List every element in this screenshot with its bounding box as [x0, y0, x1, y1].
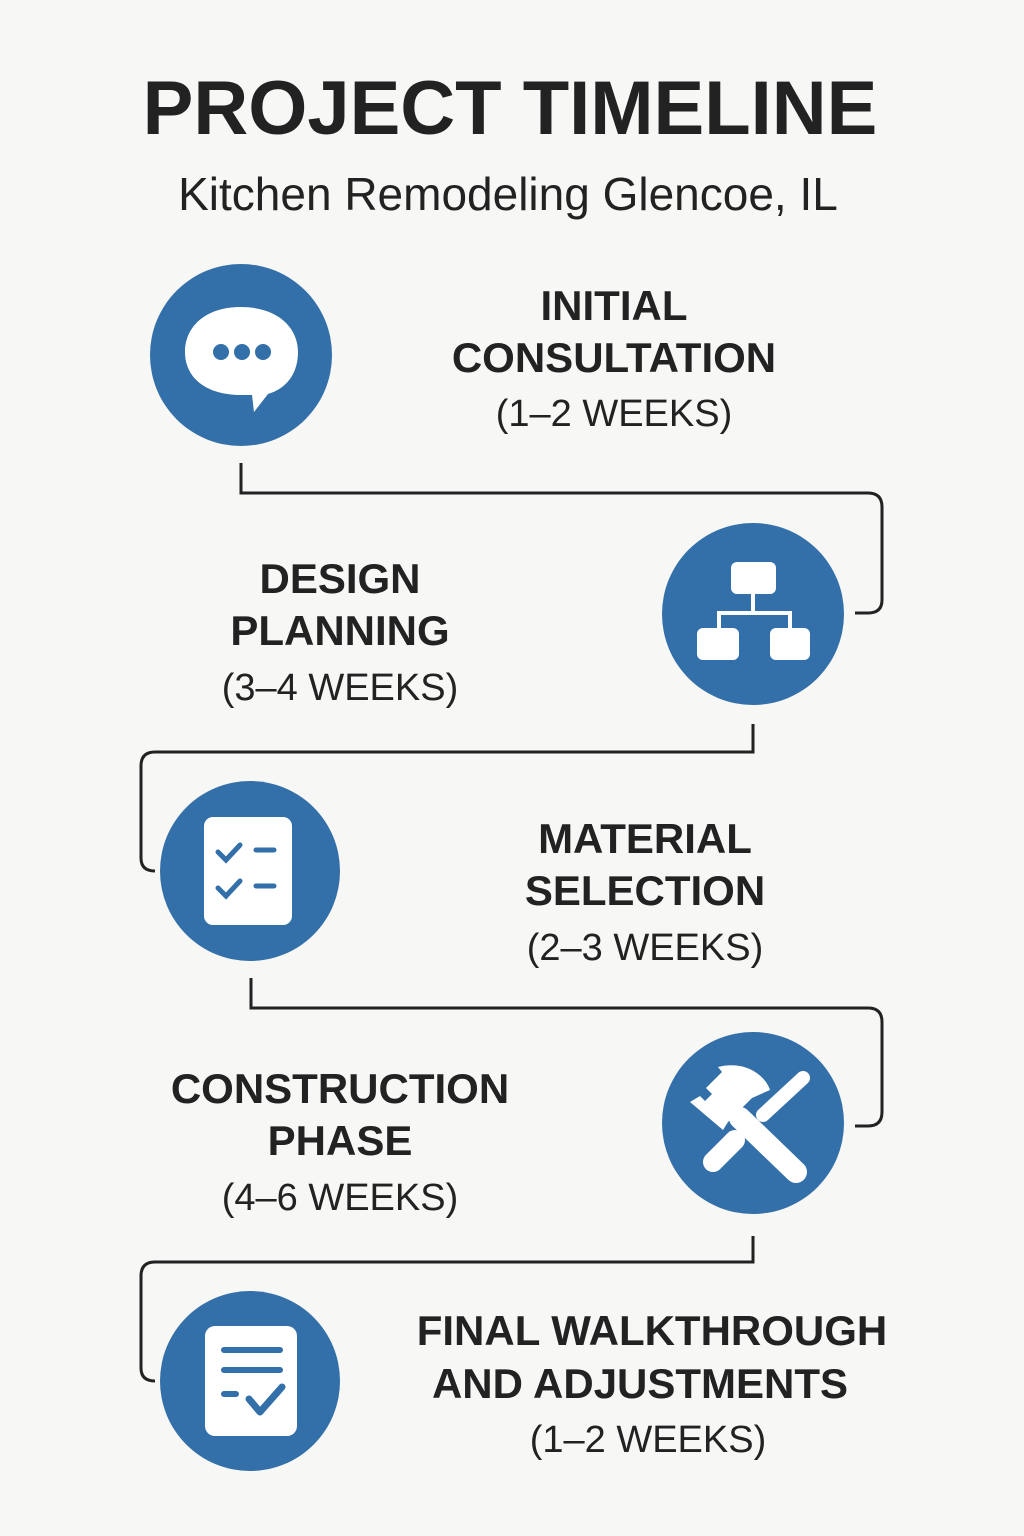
step 2 text: DESIGN	[259, 555, 421, 602]
step 2 text: (3–4 WEEKS)	[222, 667, 458, 709]
step 3 text: SELECTION	[525, 867, 765, 914]
step 4 text: PHASE	[268, 1117, 412, 1164]
step 1 text: CONSULTATION	[452, 334, 776, 381]
step 3 text: MATERIAL	[538, 815, 752, 862]
connector 2	[141, 724, 753, 871]
subtitle: Kitchen Remodeling Glencoe, IL	[178, 168, 838, 220]
step 1 text: INITIAL	[541, 282, 687, 329]
step 5 text: AND ADJUSTMENTS	[432, 1360, 848, 1407]
connector 4	[141, 1236, 753, 1381]
icon: flowchart	[662, 523, 844, 705]
title: PROJECT TIMELINE	[143, 66, 877, 151]
step 4 text: CONSTRUCTION	[171, 1065, 509, 1112]
step 4 text	[171, 1065, 509, 1219]
icon: tools	[662, 1032, 844, 1214]
step 1 text: (1–2 WEEKS)	[496, 393, 732, 435]
icon: checklist	[160, 781, 340, 961]
step 5 text: (1–2 WEEKS)	[530, 1419, 766, 1461]
connector 1	[241, 463, 882, 613]
step 5 text: FINAL WALKTHROUGH	[417, 1307, 887, 1354]
step 2 text: PLANNING	[230, 607, 450, 654]
step 2 text	[222, 555, 458, 709]
step 5 text	[417, 1307, 887, 1461]
connector 3	[251, 978, 882, 1126]
step 3 text	[525, 815, 765, 969]
step 3 text: (2–3 WEEKS)	[527, 927, 763, 969]
step 4 text: (4–6 WEEKS)	[222, 1177, 458, 1219]
icon: chat bubble	[150, 264, 332, 446]
icon: document check	[160, 1291, 340, 1471]
step 1 text	[452, 282, 776, 435]
